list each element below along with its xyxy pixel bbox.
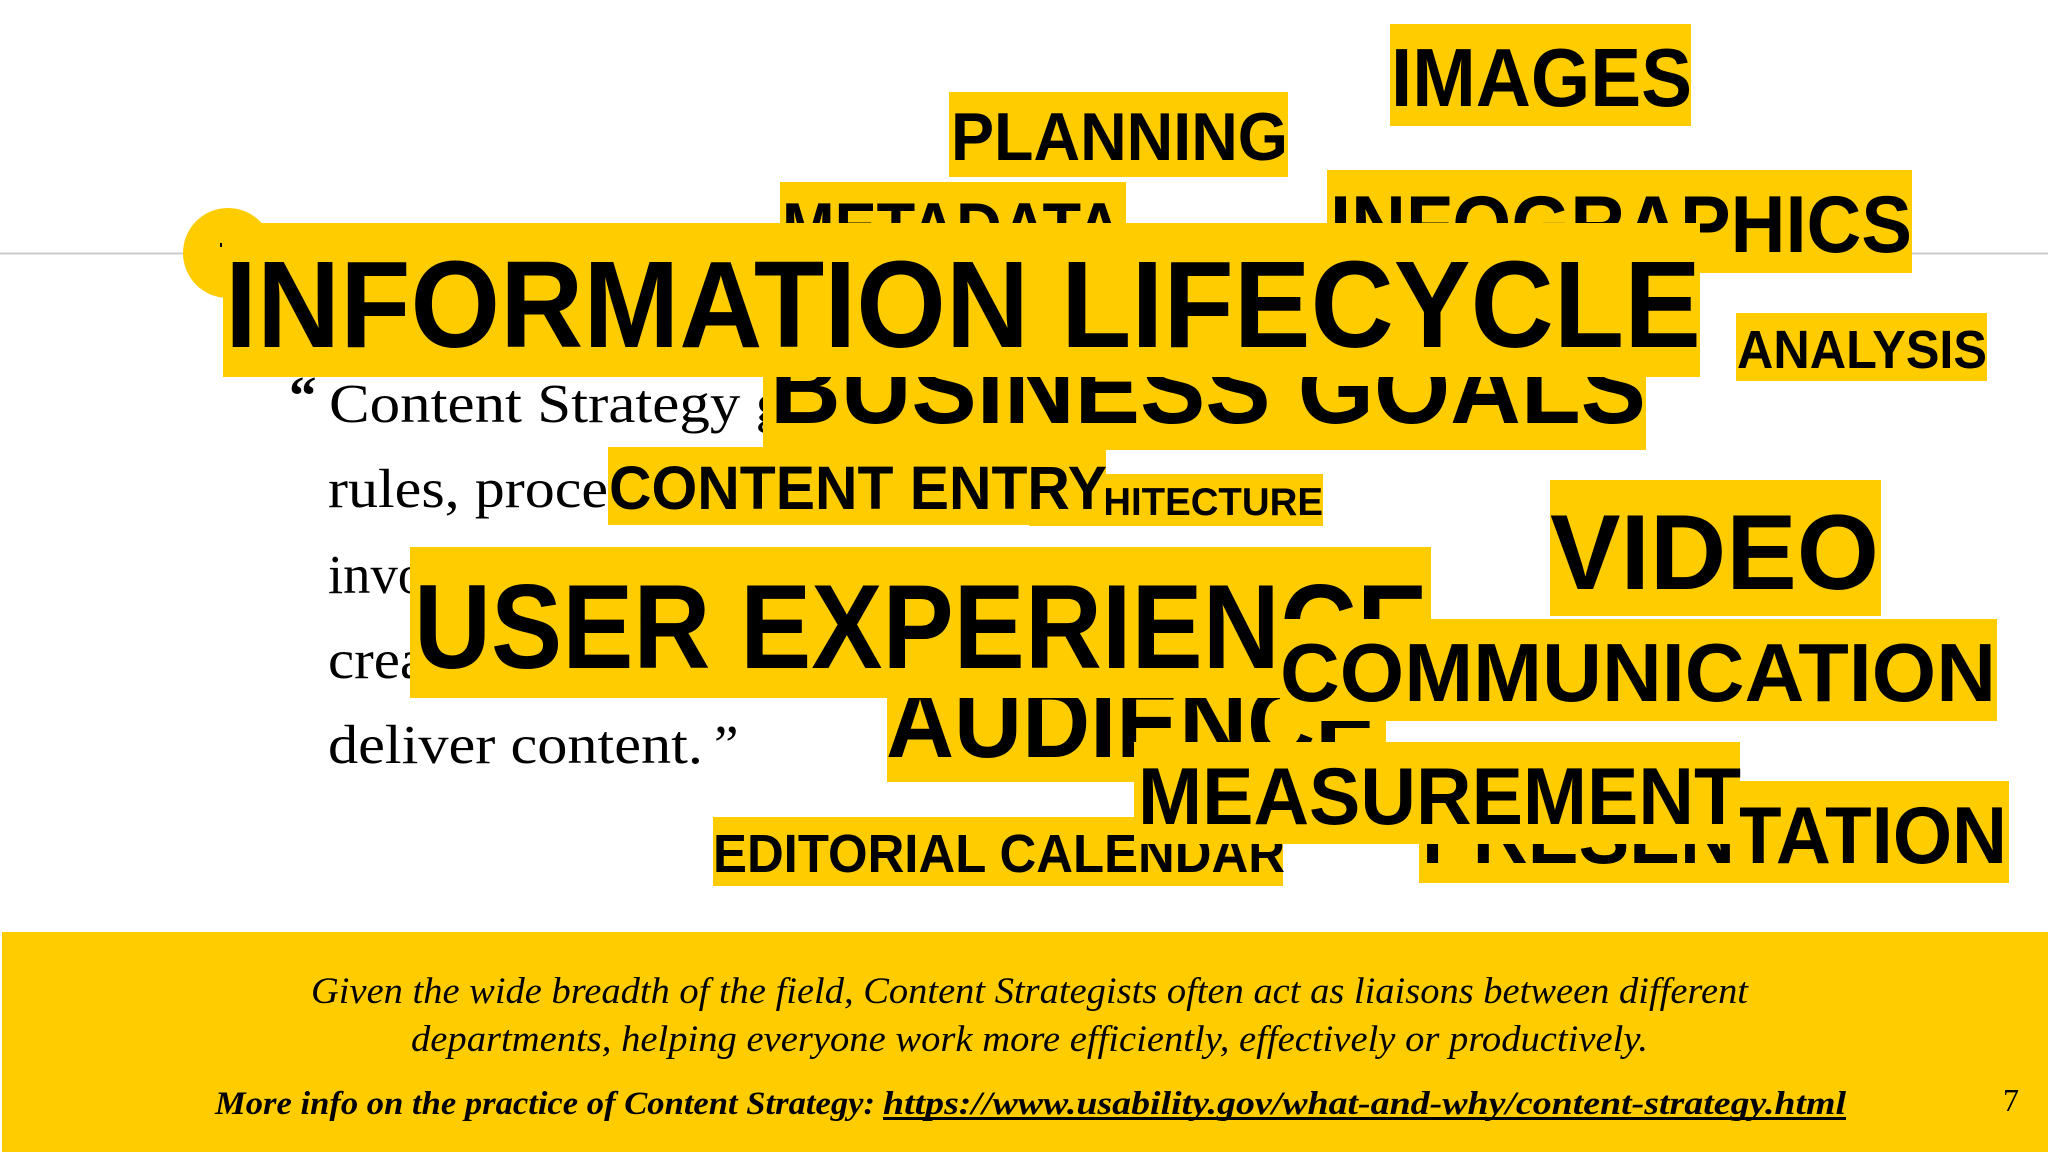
more info line with link: https://www.usability.gov/what-and-why/content-strategy.html <box>883 1086 1847 1122</box>
word: measurement: MEASUREMENT <box>1138 752 1741 842</box>
quote: content strategy definition <box>289 365 786 775</box>
word: video: VIDEO <box>1550 492 1879 612</box>
word: business goals: BUSINESS GOALS <box>770 331 1646 445</box>
word: user experience: USER EXPERIENCE <box>414 560 1428 694</box>
quote: content strategy definition: crea <box>328 629 426 690</box>
quote: content strategy definition: “ <box>289 365 316 426</box>
footer band <box>2 932 2048 1152</box>
footer note: departments, helping everyone work more efficiently, effectively or productively. <box>411 1019 1648 1060</box>
page number: 7 <box>2003 1082 2019 1118</box>
quote: content strategy definition: ” <box>714 714 738 775</box>
more info line with link: More info on the practice of Content Strategy: <box>214 1086 875 1122</box>
word: content entry: CONTENT ENTRY <box>609 454 1107 522</box>
footer note <box>311 971 1750 1060</box>
word: information lifecycle: INFORMATION LIFECYCLE <box>225 236 1701 374</box>
more info line with link <box>214 1086 1847 1122</box>
footer note: Given the wide breadth of the field, Content Strategists often act as liaisons between different <box>311 971 1750 1012</box>
word: metadata: METADATA <box>782 189 1122 265</box>
word: editorial calendar: EDITORIAL CALENDAR <box>713 824 1285 884</box>
word: communication: COMMUNICATION <box>1280 626 1996 719</box>
word: analysis: ANALYSIS <box>1737 320 1987 380</box>
word: planning: PLANNING <box>951 99 1288 175</box>
word: infographics: INFOGRAPHICS <box>1330 180 1912 270</box>
quote: content strategy definition: invo <box>328 544 425 605</box>
word: images: IMAGES <box>1391 31 1692 124</box>
quote: content strategy definition: Content Strategy g <box>329 373 786 434</box>
quote: content strategy definition: deliver content. <box>328 714 703 775</box>
word: audience: AUDIENCE <box>886 667 1378 778</box>
quote: content strategy definition: rules, proce <box>328 458 608 519</box>
title badge circle <box>183 208 273 298</box>
word: presentation: PRESENTATION <box>1422 791 2007 881</box>
word: architecture: ARCHITECTURE <box>1020 481 1323 524</box>
